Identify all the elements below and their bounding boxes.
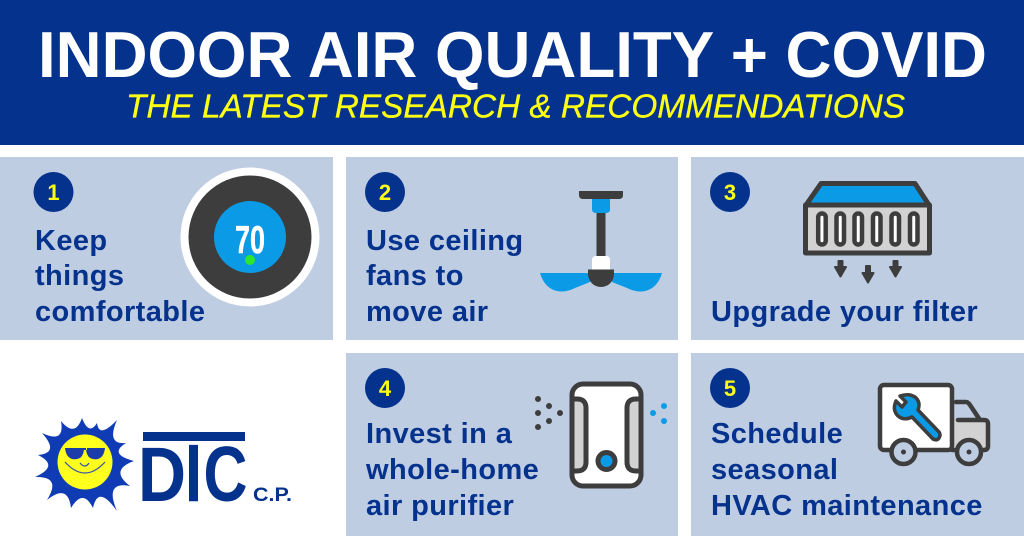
panel 1 text: comfortable <box>35 296 205 328</box>
panel 4: whole-home air purifier <box>346 353 678 536</box>
number badge 2 <box>365 172 405 212</box>
icon: air purifier <box>535 384 667 486</box>
panel 3: upgrade filter <box>691 157 1024 340</box>
icon: thermostat: 70 <box>235 219 265 262</box>
panel 2 text: Use ceiling <box>366 225 524 257</box>
logo: DTC C.P. <box>35 418 292 519</box>
panel 2: ceiling fans <box>346 157 678 340</box>
number badge 4: 4 <box>379 376 392 401</box>
icon: air filter <box>806 184 930 282</box>
icon: thermostat <box>180 168 320 306</box>
panel 3 text: Upgrade your filter <box>711 296 978 328</box>
number badge 5: 5 <box>724 376 736 401</box>
number badge 1 <box>34 172 74 212</box>
number badge 3 <box>710 172 750 212</box>
panel 4 text: Invest in a <box>366 418 513 450</box>
icon: service truck with wrench <box>880 385 988 464</box>
panel 5 text: HVAC maintenance <box>711 490 983 522</box>
panel 2 text: move air <box>366 296 488 328</box>
number badge 3: 3 <box>724 180 736 205</box>
panel 1 text: things <box>35 260 124 292</box>
panel 5 text: seasonal <box>711 454 838 486</box>
number badge 4 <box>365 368 405 408</box>
icon: ceiling fan <box>540 191 662 292</box>
panel 2 text: fans to <box>366 260 464 292</box>
panel 5 text: Schedule <box>711 418 843 450</box>
header banner <box>0 0 1024 145</box>
panel 5: seasonal HVAC maintenance <box>691 353 1024 536</box>
title: INDOOR AIR QUALITY + COVID <box>38 18 987 91</box>
number badge 2: 2 <box>379 180 391 205</box>
wordmark DTC: D <box>138 432 186 518</box>
number badge 5 <box>710 368 750 408</box>
wordmark DTC <box>142 432 246 502</box>
panel 4 text: air purifier <box>366 490 514 522</box>
number badge 1: 1 <box>47 180 60 205</box>
panel 1: keep things comfortable <box>0 157 333 340</box>
wordmark DTC: T <box>174 428 213 519</box>
panel 4 text: whole-home <box>365 454 539 486</box>
panel 1 text: Keep <box>35 225 108 257</box>
wordmark C.P.: C.P. <box>253 484 292 506</box>
icon: sun with sunglasses <box>35 418 134 511</box>
subtitle: THE LATEST RESEARCH & RECOMMENDATIONS <box>126 88 905 126</box>
wordmark DTC: C <box>204 430 248 518</box>
